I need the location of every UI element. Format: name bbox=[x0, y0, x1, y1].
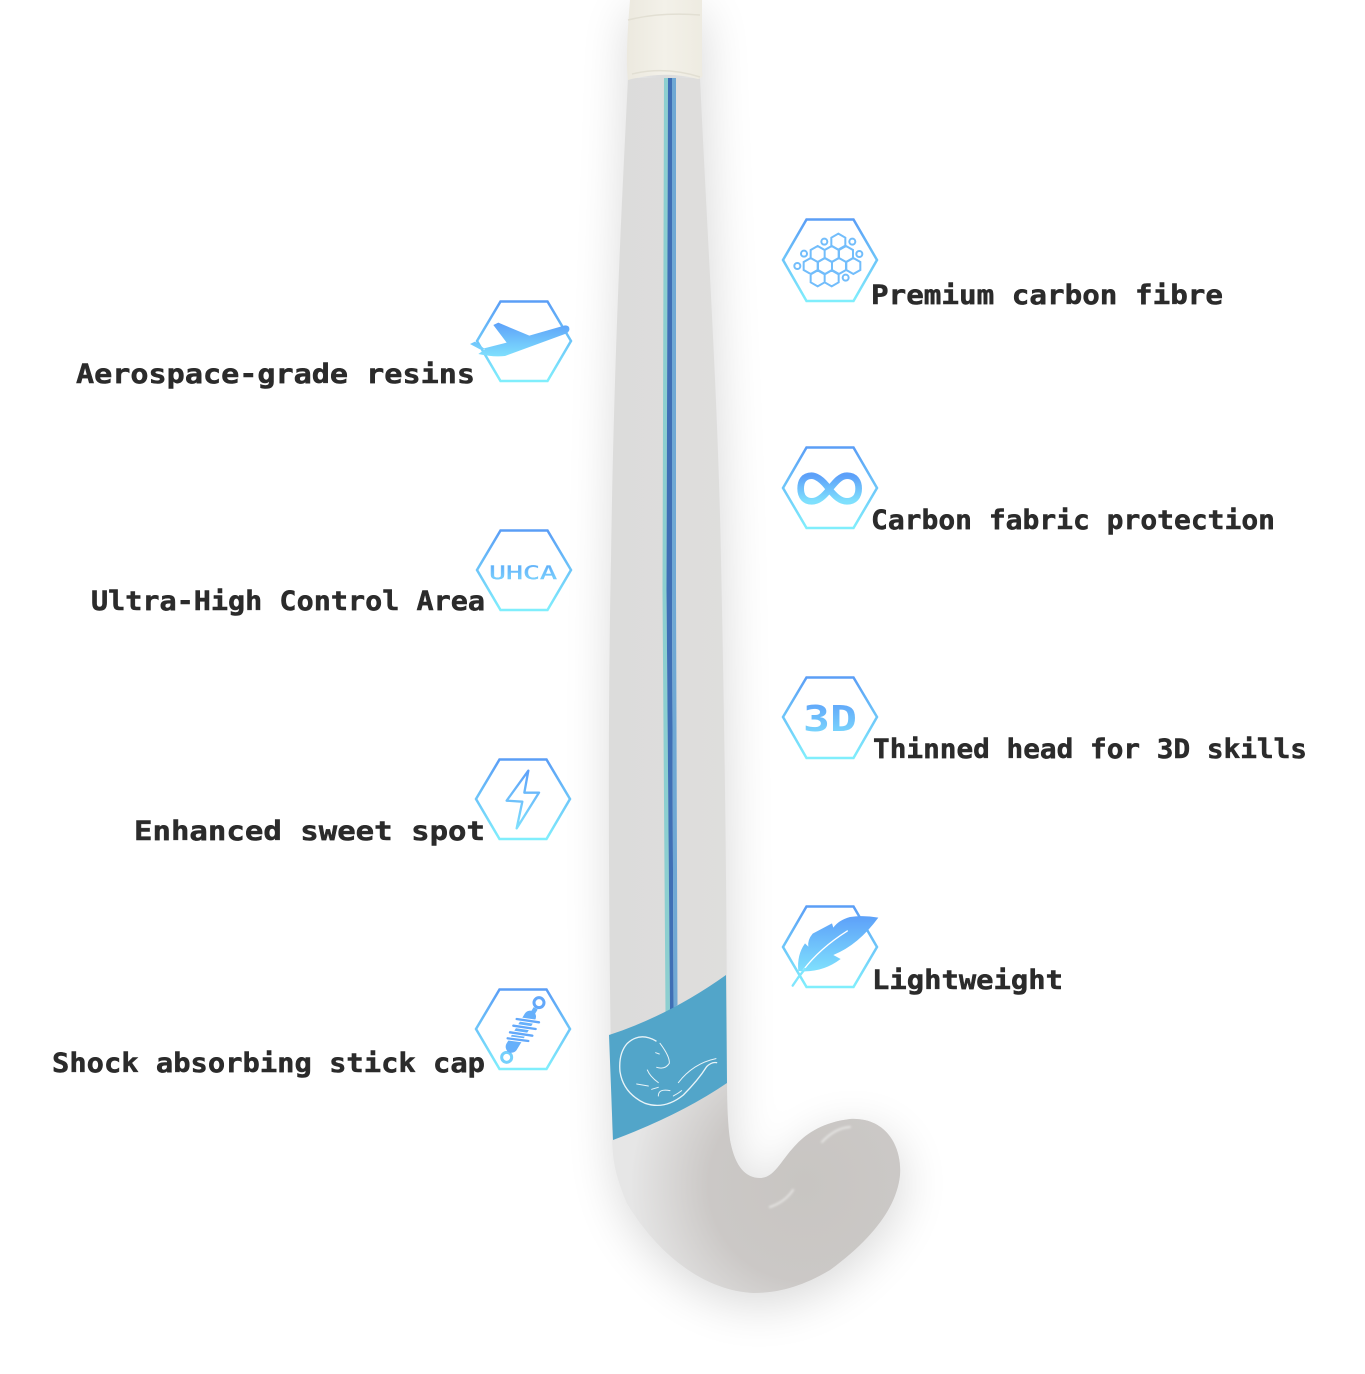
grip tape bbox=[627, 0, 702, 80]
label: Lightweight bbox=[872, 965, 1063, 996]
stick head shading bbox=[612, 1080, 900, 1293]
feature: Ultra-High Control Area bbox=[91, 530, 571, 617]
feature: Premium carbon fibre bbox=[783, 220, 1223, 311]
label: Premium carbon fibre bbox=[871, 280, 1223, 311]
label: Ultra-High Control Area bbox=[91, 586, 485, 617]
icon: hexagon with honeycomb bbox=[783, 220, 877, 301]
icon: hexagon with lightning bolt bbox=[476, 760, 570, 839]
grip wrinkles bbox=[628, 14, 700, 77]
icon: hexagon with UHCA bbox=[477, 530, 571, 610]
label: Thinned head for 3D skills bbox=[873, 734, 1307, 765]
head highlight bbox=[770, 1127, 850, 1207]
icon: hexagon with 3D: 3D bbox=[803, 699, 857, 740]
label: Aerospace-grade resins bbox=[76, 359, 475, 390]
stripes bbox=[662, 78, 670, 1012]
feature: Aerospace-grade resins bbox=[76, 302, 571, 390]
feature: Thinned head for 3D skills bbox=[783, 678, 1307, 765]
icon: hexagon with infinity bbox=[783, 448, 877, 528]
icon: hexagon with 3D bbox=[783, 678, 877, 758]
feature: Carbon fabric protection bbox=[783, 448, 1275, 536]
feature: Lightweight bbox=[783, 906, 1063, 996]
stick body bbox=[609, 78, 900, 1293]
blue band bbox=[609, 975, 727, 1140]
icon: hexagon with shock absorber bbox=[476, 990, 570, 1069]
label: Carbon fabric protection bbox=[871, 505, 1275, 536]
icon: hexagon with airplane bbox=[470, 302, 571, 381]
label: Shock absorbing stick cap bbox=[52, 1048, 485, 1079]
band logo bbox=[620, 1037, 717, 1105]
label: Enhanced sweet spot bbox=[134, 816, 485, 847]
icon: hexagon with UHCA: UHCA bbox=[489, 562, 558, 584]
hockey stick illustration bbox=[609, 0, 902, 1305]
feature: Shock absorbing stick cap bbox=[52, 990, 570, 1079]
icon: hexagon with feather bbox=[783, 906, 878, 987]
feature: Enhanced sweet spot bbox=[134, 760, 570, 847]
stick shadow bbox=[611, 12, 902, 1305]
